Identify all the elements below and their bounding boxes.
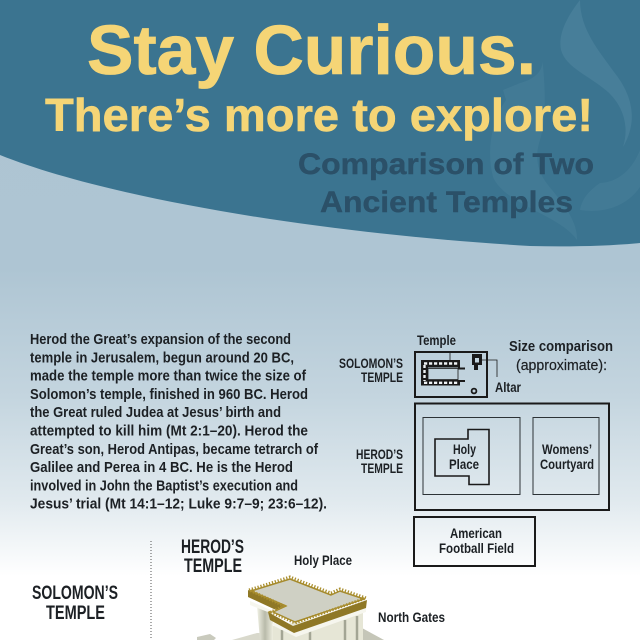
diagram: American football field: American [450,525,502,541]
text block: intro: Herod the Great’s expansion of the second [30,331,291,348]
label: Herod's temple [356,446,403,476]
heading: Solomon's temple: SOLOMON’S [32,582,118,604]
temple plan [421,352,465,386]
label: holy place: Holy Place [294,552,352,568]
label: altar: Altar [495,379,521,395]
text block: intro: involved in John the Baptist’s execution and [30,477,298,494]
womens' courtyard box [533,418,599,494]
holy place enclosure [423,418,520,494]
heading: Herod's temple: HEROD’S [181,536,244,558]
icon: flame watermark [490,0,640,240]
text block: intro: Galilee and Perea in 4 BC. He is the Herod [30,459,293,476]
front wall [273,612,363,640]
label: temple: Temple [417,332,456,348]
text block: intro: Great’s son, Herod Antipas, became tetrarch of [30,441,319,458]
roof surface [251,579,364,622]
text block: intro: made the temple more than twice the size of [30,368,307,385]
heading: Herod's temple: TEMPLE [184,555,242,577]
text block: intro [30,331,327,513]
side wall [257,606,273,640]
outer wall [415,352,487,397]
label: holy place: Holy [453,441,476,457]
label: Solomon's temple: TEMPLE [361,369,403,385]
heading: Solomon's temple [32,582,118,624]
label: womens' courtyard [540,441,594,472]
courtyard platform [232,633,384,640]
diagram: Solomon's temple plan [339,332,521,397]
label: womens' courtyard: Womens’ [542,441,592,457]
label: womens' courtyard: Courtyard [540,456,594,472]
text block: intro: Jesus’ trial (Mt 14:1–12; Luke 9:7–9; 23:6–12). [30,496,327,513]
holy place outline [435,430,489,484]
heading: Solomon's temple: TEMPLE [46,602,105,624]
text block: intro: temple in Jerusalem, begun around 20 BC, [30,349,294,366]
divider: dotted line [150,541,152,640]
label: Solomon's temple [339,355,403,385]
label: Solomon's temple: SOLOMON’S [339,355,403,371]
illustration: Herod's temple [197,577,384,640]
title line 2: There’s more to explore! [45,89,593,141]
outer block [197,634,216,640]
label: holy place: Place [449,456,479,472]
size comparison heading: (approximate): [516,357,607,374]
heading: Herod's temple [181,536,244,577]
text block: intro: attempted to kill him (Mt 2:1–20). Herod the [30,422,308,440]
label: north gates: North Gates [378,609,445,625]
label: holy place [449,441,479,472]
text block: intro: Solomon’s temple, finished in 960 BC. Herod [30,386,308,403]
diagram: American football field [414,517,535,566]
label: Herod's temple: TEMPLE [361,460,403,476]
subtitle: Comparison of Two [298,148,594,181]
title [45,11,593,141]
size comparison heading [509,338,613,374]
gold band: front [268,600,367,633]
altar [472,354,497,377]
header banner [0,0,640,246]
subtitle: Ancient Temples [320,186,573,219]
diagram: Herod's temple plan [356,404,609,510]
label: Herod's temple: HEROD’S [356,446,403,462]
laver circle [472,389,476,393]
outer wall [415,404,609,510]
diagram: American football field: Football Field [439,540,514,556]
subtitle [298,148,594,219]
size comparison heading: Size comparison [509,338,613,355]
gold spikes [249,577,366,623]
white cornice [250,601,366,637]
gold band: left [248,590,284,610]
title line 1: Stay Curious. [87,11,536,89]
text block: intro: the Great ruled Judea at Jesus’ birth and [30,404,281,421]
